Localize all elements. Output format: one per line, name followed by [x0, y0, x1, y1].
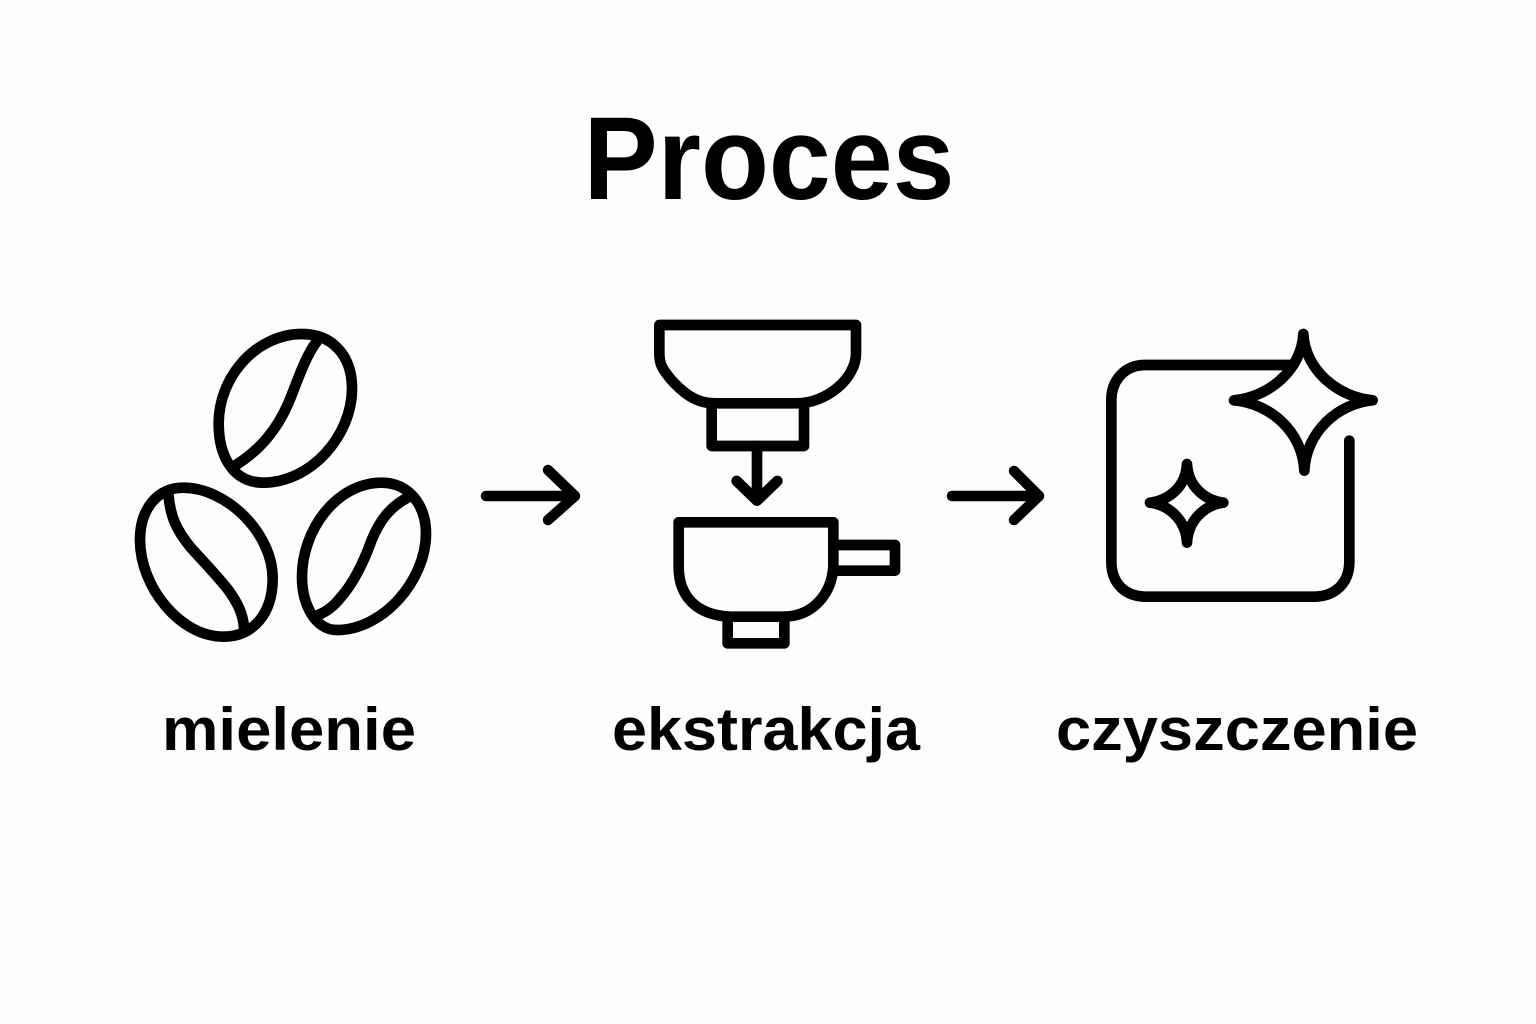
- label: czyszczenie: czyszczenie: [1056, 696, 1418, 763]
- arrow: grinding to extraction: [486, 470, 575, 520]
- title: Proces: [584, 93, 954, 225]
- label: ekstrakcja: ekstrakcja: [612, 696, 921, 763]
- label: mielenie: mielenie: [162, 696, 416, 763]
- icon: clean sparkling surface: [1111, 334, 1373, 597]
- icon: grinder and portafilter: [659, 325, 895, 643]
- arrow: extraction to cleaning: [952, 471, 1039, 520]
- icon: coffee beans: [140, 334, 426, 637]
